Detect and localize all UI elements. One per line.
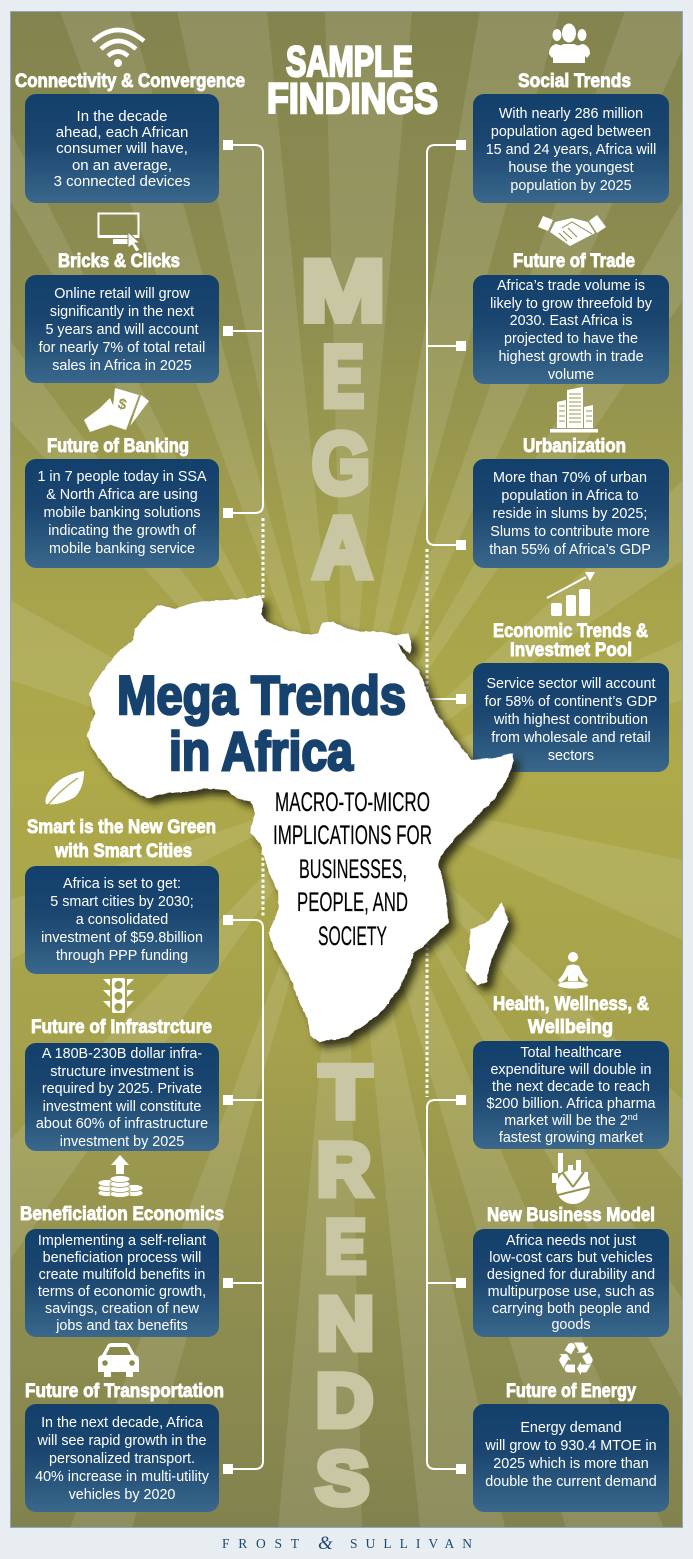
panel: future of infrastructure: [25, 978, 219, 1151]
icon: buildings: [550, 387, 598, 432]
body text: Slums to contribute more: [490, 524, 650, 540]
body text: 5 years and will account: [45, 322, 199, 338]
body text: vehicles by 2020: [69, 1487, 175, 1503]
body text: expenditure will double in: [490, 1062, 652, 1078]
body text: personalized transport.: [49, 1451, 195, 1467]
body text: In the decade: [77, 108, 167, 125]
subtitle: macro to micro: MACRO-TO-MICRO: [275, 787, 430, 817]
watermark: TRENDS: S: [316, 1437, 369, 1520]
body text: Implementing a self-reliant: [38, 1233, 206, 1249]
title: sample findings: FINDINGS: [267, 75, 438, 123]
title: sample findings: [267, 38, 438, 123]
text box: [473, 459, 669, 568]
footer logo: Frost & Sullivan: FROST: [222, 1536, 300, 1551]
heading: Future of Banking: [47, 435, 189, 457]
subtitle: macro to micro: BUSINESSES,: [299, 854, 407, 884]
heading: Social Trends: [518, 70, 631, 92]
body text: structure investment is: [50, 1064, 194, 1080]
heading: Health, Wellness, &: [493, 993, 649, 1015]
connector: lower right: [427, 942, 466, 1474]
heading: Urbanization: [523, 435, 626, 457]
body text: Online retail will grow: [54, 286, 190, 302]
body text: investment will constitute: [43, 1099, 201, 1115]
body text: from wholesale and retail: [491, 730, 651, 746]
text box: [25, 459, 219, 568]
body text: goods: [551, 1317, 591, 1333]
body text: investment by 2025: [60, 1134, 184, 1150]
icon: handshake: [538, 215, 606, 246]
icon: meditating person: [558, 952, 588, 988]
panel: connectivity and convergence: [15, 30, 245, 203]
icon: coins and arrow: [98, 1155, 143, 1198]
body text: Total healthcare: [520, 1045, 622, 1061]
body text: will grow to 930.4 MTOE in: [484, 1438, 657, 1454]
body text: a consolidated: [76, 912, 168, 928]
text box: [25, 866, 219, 974]
watermark: MEGA: A: [313, 500, 372, 596]
heading: Future of Transportation: [25, 1380, 224, 1402]
body text: fastest growing market: [499, 1130, 643, 1146]
heading: Beneficiation Economics: [20, 1203, 224, 1225]
body text: sectors: [548, 748, 594, 764]
watermark: TRENDS: T: [320, 1050, 371, 1134]
text box: [25, 275, 219, 383]
body text: house the youngest: [508, 160, 634, 176]
footer logo: Frost & Sullivan: SULLIVAN: [350, 1536, 472, 1551]
body text: In the next decade, Africa: [41, 1415, 203, 1431]
body text: on an average,: [72, 157, 172, 174]
connector: upper left: [223, 140, 263, 600]
panel: urbanization: [473, 387, 669, 568]
text box: [473, 1404, 669, 1512]
watermark: MEGA: [301, 244, 385, 596]
body text: Service sector will account: [486, 676, 656, 692]
watermark: MEGA: G: [312, 416, 370, 512]
body text: Africa’s trade volume is: [497, 278, 645, 294]
body text: indicating the growth of: [48, 523, 196, 539]
body text: 2025 which is more than: [493, 1456, 649, 1472]
body text: create multifold benefits in: [39, 1267, 205, 1283]
body text: A 180B-230B dollar infra-: [42, 1046, 202, 1062]
body text: will see rapid growth in the: [36, 1433, 207, 1449]
text box: [25, 1229, 219, 1337]
body text: consumer will have,: [56, 140, 188, 157]
panel: beneficiation economics: [20, 1155, 224, 1337]
body text: mobile banking service: [49, 541, 195, 557]
body text: with highest contribution: [493, 712, 648, 728]
text box: [473, 275, 669, 384]
icon: monitor and cursor: [98, 214, 140, 252]
icon: traffic light: [103, 978, 134, 1013]
body text: savings, creation of new: [45, 1301, 200, 1317]
panel: economic trends: [473, 572, 669, 772]
heading: Bricks & Clicks: [58, 250, 180, 272]
icon: hand with money: [84, 388, 149, 432]
icon: leaf: [46, 771, 84, 806]
main title: Mega Trends in Africa: [117, 664, 406, 782]
panel: bricks and clicks: [25, 214, 219, 383]
text box: [473, 1041, 669, 1149]
body text: projected to have the: [504, 331, 638, 347]
body text: market will be the 2: [504, 1112, 638, 1129]
watermark: TRENDS: N: [317, 1282, 374, 1365]
text box: [473, 94, 669, 203]
heading: New Business Model: [487, 1204, 655, 1226]
watermark: MEGA: E: [322, 329, 364, 425]
heading: [493, 993, 649, 1038]
body text: than 55% of Africa’s GDP: [489, 542, 651, 558]
body text: required by 2025. Private: [42, 1081, 202, 1097]
connector: upper right: [427, 140, 466, 704]
watermark: TRENDS: R: [317, 1128, 371, 1211]
icon: recycle: ♻: [555, 1332, 597, 1386]
text box: [25, 1043, 219, 1151]
body text: population by 2025: [510, 178, 632, 194]
icon: hand with money: $: [116, 395, 129, 414]
body text: 40% increase in multi-utility: [35, 1469, 210, 1485]
icon: charts: [552, 1153, 590, 1204]
text box: [473, 1229, 669, 1337]
footer logo: Frost & Sullivan: &: [318, 1533, 333, 1554]
body text: population in Africa to: [501, 488, 639, 504]
heading: [493, 620, 648, 661]
body text: population aged between: [491, 124, 651, 140]
body text: reside in slums by 2025;: [493, 506, 647, 522]
body text: multipurpose use, such as: [488, 1284, 654, 1300]
body text: ahead, each African: [56, 124, 188, 141]
body text: With nearly 286 million: [499, 106, 643, 122]
icon: car: [98, 1343, 139, 1377]
watermark: TRENDS: [316, 1050, 374, 1520]
heading: Connectivity & Convergence: [15, 70, 245, 92]
panel: new business model: [473, 1153, 669, 1337]
body text: the next decade to reach: [492, 1079, 650, 1095]
subtitle: macro to micro: PEOPLE, AND: [297, 887, 408, 917]
body text: 1 in 7 people today in SSA: [37, 469, 207, 485]
body text: about 60% of infrastructure: [36, 1116, 208, 1132]
body text: low-cost cars but vehicles: [489, 1250, 653, 1266]
subtitle: macro to micro: SOCIETY: [318, 921, 387, 951]
heading: Future of Trade: [513, 250, 635, 272]
icon: people: [549, 24, 590, 63]
body text: for 58% of continent’s GDP: [485, 694, 657, 710]
main title: Mega Trends in Africa: in Africa: [169, 720, 353, 782]
panel: future of trade: [473, 215, 669, 384]
map: Africa and Madagascar: [87, 595, 513, 1042]
panel: future of banking: [25, 388, 219, 568]
panel: health and wellness: [473, 952, 669, 1149]
heading: Future of Infrastrcture: [31, 1016, 212, 1038]
body text: jobs and tax benefits: [55, 1318, 188, 1334]
heading: [27, 816, 216, 862]
body text: designed for durability and: [487, 1267, 655, 1283]
watermark: TRENDS: E: [325, 1205, 366, 1288]
heading: with Smart Cities: [54, 840, 192, 862]
text box: [25, 1404, 219, 1512]
body text: Africa needs not just: [506, 1233, 636, 1249]
subtitle: macro to micro: IMPLICATIONS FOR: [273, 820, 432, 850]
body text: carrying both people and: [492, 1301, 650, 1317]
body text: & North Africa are using: [46, 487, 198, 503]
body text: Energy demand: [520, 1420, 622, 1436]
heading: Future of Energy: [506, 1380, 636, 1402]
subtitle: macro to micro: [273, 787, 432, 951]
panel: social trends: [473, 24, 669, 203]
body text: highest growth in trade: [498, 349, 644, 365]
panel: future of energy: [473, 1332, 669, 1512]
body text: nd: [628, 1112, 638, 1122]
body text: double the current demand: [485, 1474, 657, 1490]
heading: Investmet Pool: [510, 639, 632, 661]
body text: beneficiation process will: [43, 1250, 201, 1266]
body text: $200 billion. Africa pharma: [486, 1096, 656, 1112]
body text: volume: [548, 367, 594, 383]
watermark: MEGA: M: [301, 244, 385, 340]
body text: 2030. East Africa is: [510, 313, 632, 329]
text box: [473, 663, 669, 772]
body text: through PPP funding: [56, 948, 188, 964]
body text: sales in Africa in 2025: [52, 358, 192, 374]
body text: likely to grow threefold by: [490, 296, 653, 312]
text box: [25, 94, 219, 203]
body text: mobile banking solutions: [43, 505, 201, 521]
panel: future of transportation: [25, 1343, 224, 1512]
watermark: TRENDS: D: [316, 1359, 373, 1442]
connector: lower left: [223, 852, 263, 1474]
body text: 15 and 24 years, Africa will: [486, 142, 656, 158]
heading: Smart is the New Green: [27, 816, 216, 838]
body text: terms of economic growth,: [38, 1284, 206, 1300]
body text: 3 connected devices: [54, 173, 190, 190]
body text: investment of $59.8billion: [41, 930, 203, 946]
body text: for nearly 7% of total retail: [39, 340, 205, 356]
icon: wifi: [93, 30, 144, 67]
icon: rising bar chart: [547, 572, 595, 616]
heading: Economic Trends &: [493, 620, 648, 642]
heading: Wellbeing: [528, 1016, 613, 1038]
body text: 5 smart cities by 2030;: [50, 894, 194, 910]
body text: Africa is set to get:: [63, 876, 181, 892]
body text: More than 70% of urban: [493, 470, 647, 486]
main title: Mega Trends in Africa: Mega Trends: [117, 664, 406, 726]
title: sample findings: SAMPLE: [286, 38, 413, 86]
footer logo: Frost & Sullivan: [222, 1533, 472, 1554]
panel: smart cities: [25, 771, 219, 974]
body text: significantly in the next: [50, 304, 194, 320]
